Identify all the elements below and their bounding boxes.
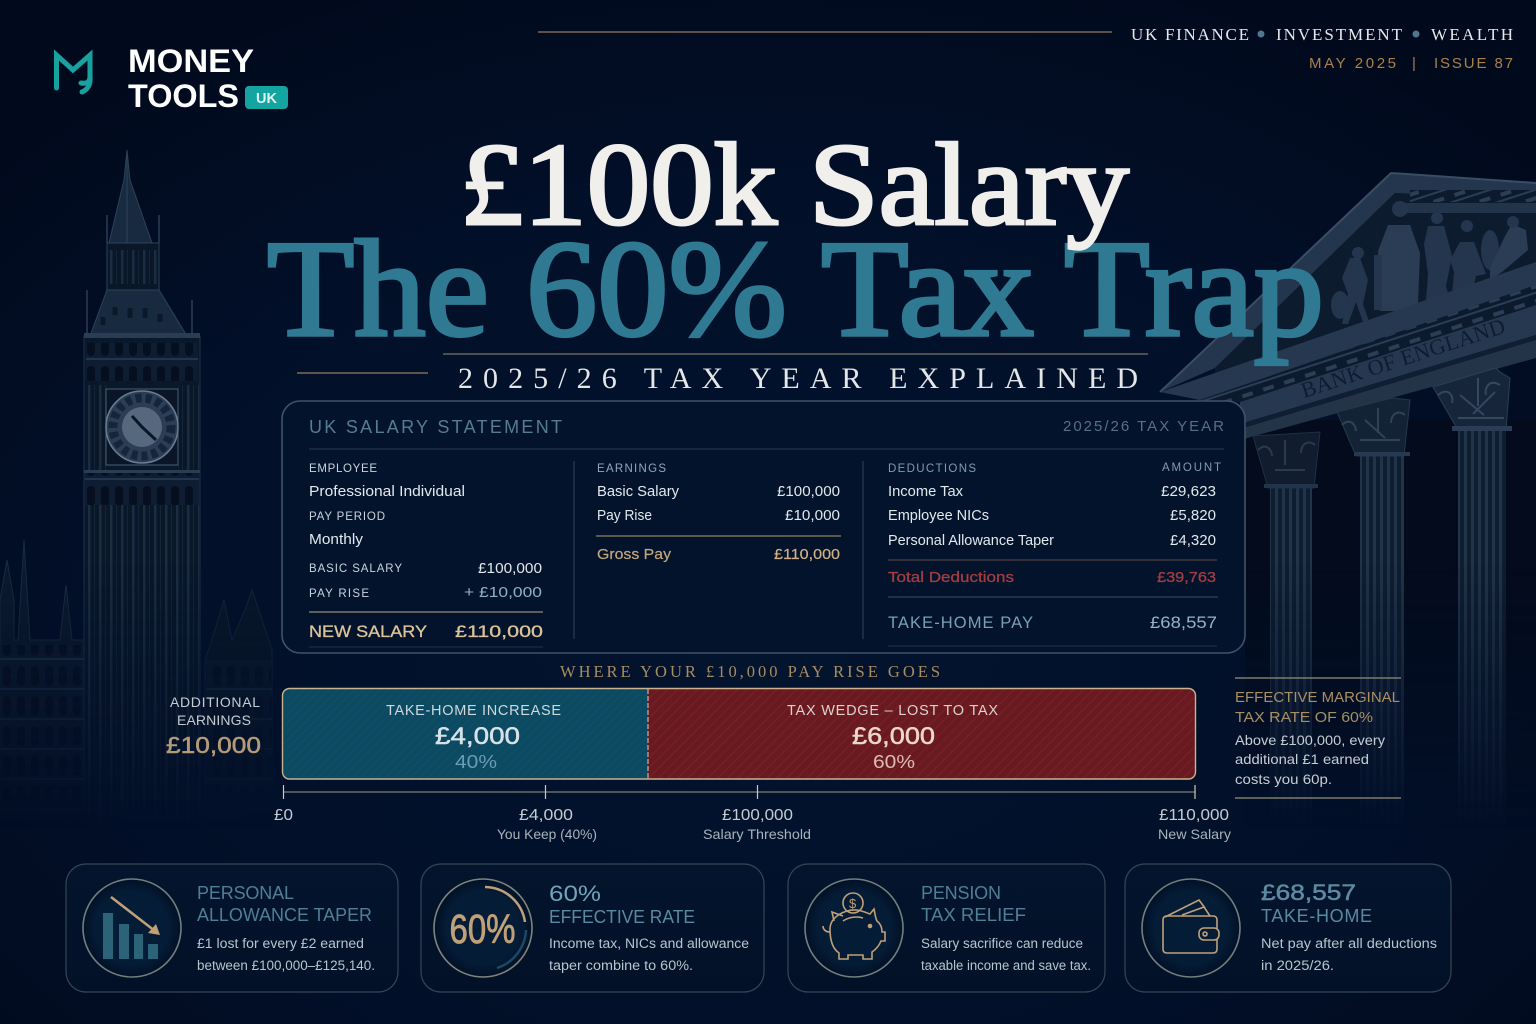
label: additional earnings: £10,000 — [166, 732, 261, 758]
callout: marginal rate: EFFECTIVE MARGINAL — [1235, 690, 1400, 706]
axis: You Keep (40%) — [497, 826, 597, 842]
segment: tax wedge: £6,000 — [852, 723, 935, 750]
card: personal allowance taper: £1 lost for every £2 earned — [197, 936, 364, 951]
column: earnings: £100,000 — [777, 484, 840, 500]
segment: take-home: £4,000 — [435, 723, 520, 750]
card: personal allowance taper: ALLOWANCE TAPER — [197, 905, 372, 925]
column: employee: £110,000 — [455, 622, 543, 641]
title — [267, 119, 1324, 365]
panel: salary statement: UK SALARY STATEMENT — [309, 417, 562, 437]
column: deductions: Total Deductions — [888, 569, 1014, 586]
callout: marginal rate: Above £100,000, every — [1235, 732, 1385, 748]
column: deductions: £39,763 — [1157, 569, 1216, 586]
header tagline: UK FINANCE — [1131, 25, 1249, 44]
column: earnings: Gross Pay — [597, 546, 672, 563]
column: employee: PAY RISE — [309, 588, 369, 600]
card: effective rate — [421, 864, 764, 992]
column: earnings: EARNINGS — [597, 463, 666, 475]
card: take-home: Net pay after all deductions — [1261, 936, 1437, 951]
text: bank name: BANK OF ENGLAND — [1298, 313, 1508, 403]
illustration: Big Ben and Westminster — [0, 150, 272, 758]
axis — [274, 785, 1231, 842]
column: deductions: £4,320 — [1170, 533, 1216, 549]
card: pension tax relief: taxable income and save tax. — [921, 958, 1091, 973]
icon: falling bars — [83, 879, 181, 977]
column: employee: + £10,000 — [464, 584, 542, 601]
column: deductions: £29,623 — [1161, 484, 1216, 500]
column: earnings: £10,000 — [785, 508, 840, 524]
column: employee: £100,000 — [478, 561, 542, 577]
column: earnings: Pay Rise — [597, 508, 652, 524]
icon: piggy bank: $ — [849, 896, 857, 911]
header tagline: MAY 2025 — [1309, 55, 1396, 72]
title: Tax — [821, 212, 1034, 365]
icon: clock face — [106, 389, 178, 465]
column: deductions: Personal Allowance Taper — [888, 533, 1054, 549]
callout: marginal rate: costs you 60p. — [1235, 771, 1332, 787]
axis: Salary Threshold — [703, 826, 811, 842]
badge: UK — [256, 91, 278, 107]
column: employee: Professional Individual — [309, 484, 465, 500]
segment: tax wedge — [648, 688, 1195, 779]
icon: piggy bank — [805, 879, 903, 977]
header tagline: | — [1412, 55, 1416, 72]
column: deductions: TAKE-HOME PAY — [888, 614, 1033, 632]
card: effective rate: Income tax, NICs and allowance — [549, 936, 749, 951]
card: effective rate: 60% — [549, 881, 601, 906]
icon: 60% dial: 60% — [450, 906, 516, 952]
card: pension tax relief: TAX RELIEF — [921, 905, 1026, 925]
segment: tax wedge: 60% — [873, 752, 915, 772]
header tagline: ISSUE 87 — [1434, 55, 1513, 72]
logo: TOOLS — [128, 78, 239, 114]
card: take-home — [1125, 864, 1451, 992]
card: take-home: in 2025/26. — [1261, 958, 1334, 973]
title: £100k — [460, 119, 777, 250]
column: employee: Monthly — [309, 532, 364, 548]
callout: marginal rate: additional £1 earned — [1235, 751, 1369, 767]
card: effective rate: taper combine to 60%. — [549, 958, 693, 973]
column: deductions: Income Tax — [888, 484, 964, 500]
card: pension tax relief: PENSION — [921, 883, 1001, 903]
axis: £0 — [274, 807, 293, 824]
axis: £4,000 — [519, 807, 573, 824]
title: Trap — [1064, 212, 1324, 365]
card: take-home: £68,557 — [1261, 880, 1356, 905]
title: 60% — [526, 212, 787, 365]
panel: salary statement — [282, 401, 1245, 653]
segment: take-home: 40% — [455, 752, 497, 772]
segment: take-home: TAKE-HOME INCREASE — [386, 703, 561, 719]
header tagline: WEALTH — [1431, 25, 1513, 44]
column: deductions: Employee NICs — [888, 508, 989, 524]
illustration: Bank of England — [1160, 172, 1536, 766]
pediment figures — [1331, 201, 1528, 324]
card: effective rate: EFFECTIVE RATE — [549, 907, 695, 927]
column: employee: BASIC SALARY — [309, 563, 402, 575]
subtitle: 2025/26 TAX YEAR EXPLAINED — [458, 362, 1138, 395]
column: deductions: AMOUNT — [1162, 462, 1221, 474]
stacked bar chart — [282, 688, 1196, 779]
column: deductions: DEDUCTIONS — [888, 463, 976, 475]
column: employee — [309, 463, 543, 647]
card: pension tax relief: Salary sacrifice can reduce — [921, 936, 1083, 951]
label: additional earnings — [166, 694, 261, 758]
column: earnings — [596, 463, 841, 563]
label: additional earnings: ADDITIONAL — [170, 694, 260, 710]
header tagline — [538, 25, 1513, 72]
card: personal allowance taper: between £100,000–£125,140. — [197, 958, 375, 973]
column: deductions: £5,820 — [1170, 508, 1216, 524]
badge — [245, 86, 288, 109]
header tagline: INVESTMENT — [1276, 25, 1403, 44]
column: deductions — [888, 462, 1221, 646]
column: earnings: £110,000 — [774, 546, 840, 563]
callout: marginal rate — [1235, 678, 1401, 798]
card: personal allowance taper: PERSONAL — [197, 883, 294, 903]
panel: salary statement: 2025/26 TAX YEAR — [1063, 418, 1224, 435]
axis: New Salary — [1158, 826, 1231, 842]
card: take-home: TAKE-HOME — [1261, 906, 1372, 926]
title: Salary — [809, 119, 1129, 250]
icon: 60% dial — [434, 879, 532, 977]
column: deductions: £68,557 — [1150, 614, 1217, 632]
title: The — [267, 212, 489, 365]
icon: wallet — [1142, 879, 1240, 977]
callout: marginal rate: TAX RATE OF 60% — [1235, 710, 1373, 726]
segment: tax wedge: TAX WEDGE – LOST TO TAX — [787, 703, 998, 719]
logo: MONEY — [128, 43, 254, 79]
column: employee: PAY PERIOD — [309, 511, 385, 523]
icon: logo mark — [56, 55, 90, 92]
chart heading: WHERE YOUR £10,000 PAY RISE GOES — [560, 662, 940, 681]
label: additional earnings: EARNINGS — [177, 712, 251, 728]
axis: £110,000 — [1159, 807, 1229, 824]
segment: take-home — [283, 688, 648, 779]
card: pension tax relief — [788, 864, 1105, 992]
column: employee: EMPLOYEE — [309, 463, 377, 475]
axis: £100,000 — [722, 807, 793, 824]
column: employee: NEW SALARY — [309, 623, 427, 641]
column: earnings: Basic Salary — [597, 484, 680, 500]
card: personal allowance taper — [66, 864, 398, 992]
logo — [56, 43, 288, 114]
